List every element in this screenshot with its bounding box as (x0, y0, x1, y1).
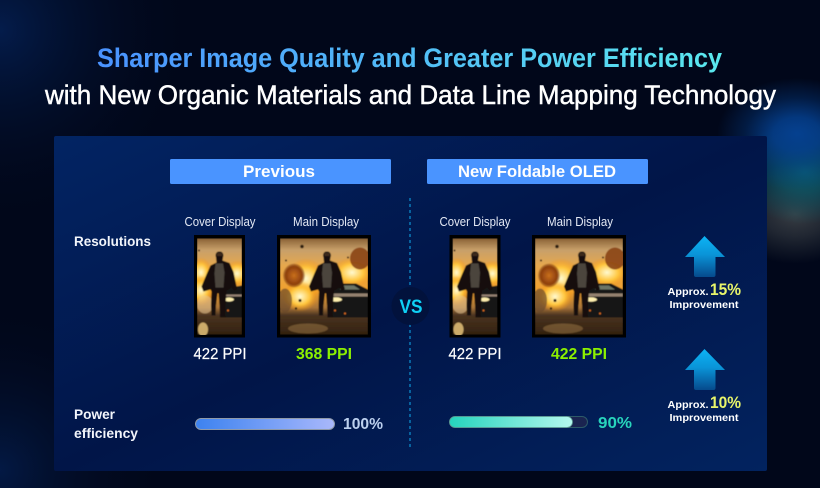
previous cover display: Cover Display (184, 215, 256, 229)
new cover display: Cover Display (440, 215, 511, 229)
previous cover display (184, 215, 256, 363)
callout: power improvement: Approx. (668, 399, 709, 411)
panel: comparison (54, 136, 767, 471)
new cover display: 422 PPI (448, 346, 502, 363)
title line 2: with New Organic Materials and Data Line Mapping Technology (44, 80, 776, 110)
callout: resolution improvement: Improvement (670, 299, 739, 311)
icon: up arrow (685, 349, 725, 390)
previous cover display: 422 PPI (194, 346, 246, 363)
label: power efficiency: efficiency (74, 426, 139, 441)
icon: up arrow (685, 236, 725, 277)
previous main display (277, 215, 373, 363)
title (44, 43, 776, 110)
callout: power improvement: 10% (710, 394, 741, 412)
vs badge: VS (400, 297, 422, 318)
label: power efficiency: Power (74, 407, 116, 422)
callout: resolution improvement: Approx. (668, 286, 709, 298)
header: previous: Previous (243, 162, 315, 181)
bar: new power 90% (450, 415, 632, 432)
new main display (532, 215, 628, 363)
new main display: Main Display (547, 215, 614, 229)
header: new foldable OLED: New Foldable OLED (458, 162, 616, 181)
previous main display: Main Display (293, 215, 360, 229)
header: new foldable OLED (427, 159, 648, 184)
title line 1: Sharper Image Quality and Greater Power Efficiency (97, 43, 722, 73)
bar: previous power 100% (196, 416, 383, 433)
vs badge (392, 287, 430, 325)
callout: power improvement (668, 349, 741, 424)
label: power efficiency (74, 407, 139, 441)
label: resolutions: Resolutions (74, 234, 151, 249)
callout: resolution improvement (668, 236, 741, 311)
new main display: 422 PPI (551, 346, 607, 363)
callout: power improvement: Improvement (670, 412, 739, 424)
bar: new power 90%: 90% (598, 415, 632, 432)
new cover display (440, 215, 511, 363)
previous main display: 368 PPI (296, 346, 352, 363)
bar: previous power 100%: 100% (343, 416, 383, 433)
vs divider (409, 198, 411, 449)
callout: resolution improvement: 15% (710, 281, 741, 299)
header: previous (170, 159, 391, 184)
